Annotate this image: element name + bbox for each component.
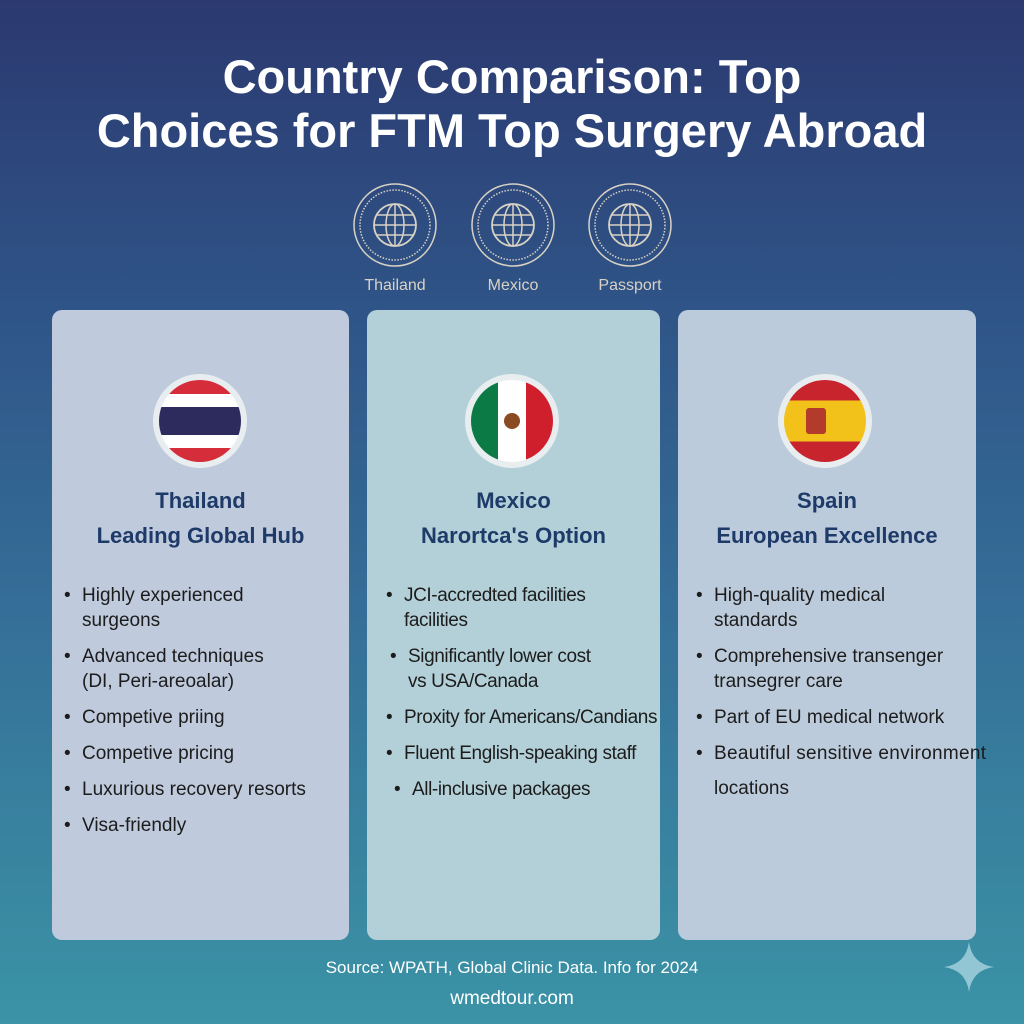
- icon: Mexico globe: Mexico: [488, 277, 538, 294]
- panel: Thailand: [52, 310, 349, 940]
- icon: Mexico globe: [471, 183, 555, 294]
- heading: Spain: [716, 488, 938, 548]
- heading: Spain: European Excellence: [716, 523, 938, 548]
- list: Mexico: All-inclusive packages: [412, 779, 590, 800]
- icon: Thailand globe: Thailand: [364, 277, 426, 294]
- list: Thailand: Visa-friendly: [82, 815, 186, 836]
- list: Thailand: surgeons: [82, 610, 160, 631]
- list: Spain: Comprehensive transenger: [714, 646, 943, 667]
- list: Mexico: facilities: [404, 610, 468, 631]
- title: Choices for FTM Top Surgery Abroad: [97, 104, 927, 157]
- list: Spain: Beautiful sensitive environment: [714, 743, 986, 764]
- list: Spain: Part of EU medical network: [714, 707, 944, 728]
- list: Thailand: [64, 585, 306, 836]
- list: Mexico: Significantly lower cost: [408, 646, 591, 667]
- icon: Passport globe: Passport: [598, 277, 662, 294]
- flag: Mexico: [465, 374, 559, 468]
- list: Mexico: [386, 585, 657, 800]
- list: Thailand: Advanced techniques: [82, 646, 264, 667]
- title: [97, 50, 927, 157]
- heading: Mexico: Mexico: [476, 488, 551, 513]
- heading: Thailand: [97, 488, 304, 548]
- list: Thailand: Competive pricing: [82, 743, 234, 764]
- panel: Mexico: [367, 310, 660, 940]
- list: Mexico: JCI-accredted facilities: [404, 585, 586, 606]
- list: Spain: [696, 585, 986, 799]
- list: Spain: locations: [714, 778, 789, 799]
- heading: Thailand: Leading Global Hub: [97, 523, 304, 548]
- heading: Spain: Spain: [797, 488, 857, 513]
- panel: Spain: [678, 310, 976, 940]
- icon: Thailand globe: [353, 183, 437, 294]
- footer: website: wmedtour.com: [450, 988, 574, 1009]
- list: Mexico: Fluent English-speaking staff: [404, 743, 636, 764]
- list: Spain: transegrer care: [714, 671, 843, 692]
- heading: Mexico: [421, 488, 606, 548]
- list: Thailand: Competive priing: [82, 707, 225, 728]
- icon: sparkle: [944, 942, 994, 992]
- source text: Source: WPATH, Global Clinic Data. Info for 2024: [326, 958, 698, 977]
- list: Thailand: Highly experienced: [82, 585, 244, 606]
- flag: Spain: [778, 374, 872, 468]
- heading: Thailand: Thailand: [155, 488, 246, 513]
- list: Spain: High-quality medical: [714, 585, 885, 606]
- title: Country Comparison: Top: [223, 50, 801, 103]
- list: Mexico: vs USA/Canada: [408, 671, 538, 692]
- list: Mexico: Proxity for Americans/Candians: [404, 707, 657, 728]
- list: Thailand: Luxurious recovery resorts: [82, 779, 306, 800]
- heading: Mexico: Narortca's Option: [421, 523, 606, 548]
- flag: Thailand: [153, 374, 247, 468]
- icon: Passport globe: [588, 183, 672, 294]
- list: Thailand: (DI, Peri-areoalar): [82, 671, 234, 692]
- list: Spain: standards: [714, 610, 797, 631]
